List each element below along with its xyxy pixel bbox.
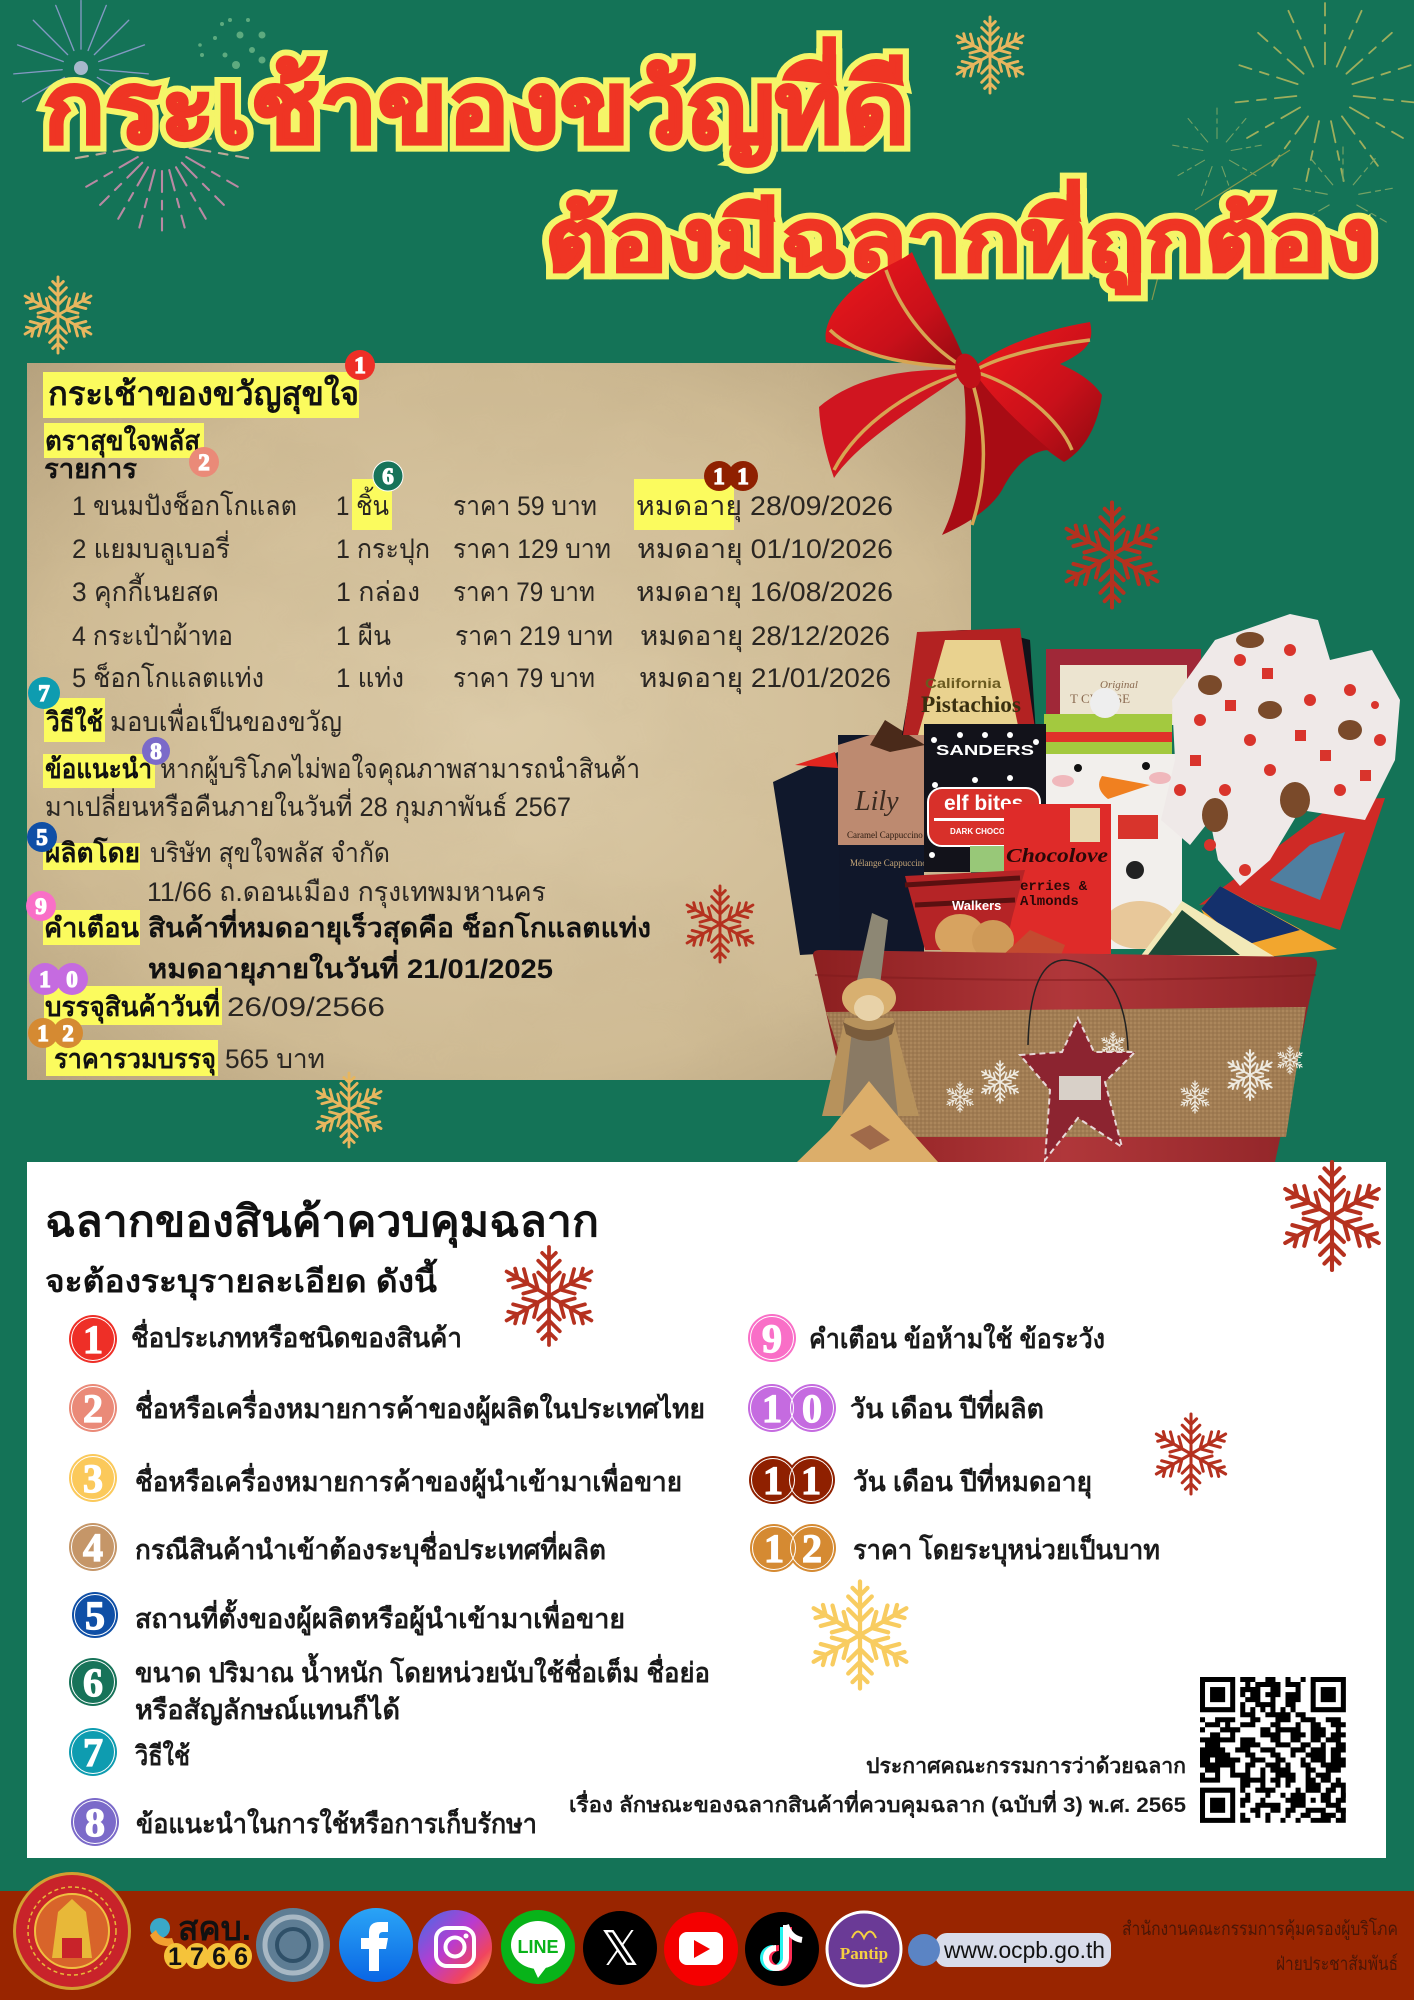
warning: คำเตือน	[44, 913, 140, 943]
brand: ตราสุขใจพลัส	[45, 425, 200, 458]
icon: Pantip	[827, 1912, 901, 1986]
icon: CP logo	[256, 1908, 330, 1982]
packing date: บรรจุสินค้าวันที่	[45, 987, 220, 1024]
item 12: 1	[764, 1526, 784, 1571]
advice	[45, 753, 640, 824]
badges on paper	[26, 350, 758, 1048]
badges on paper: 9	[35, 894, 47, 919]
chocolove bar: erries &	[1020, 879, 1088, 895]
item 11: 1	[801, 1458, 821, 1503]
badges on paper: 8	[150, 739, 162, 764]
lily box	[795, 720, 927, 955]
hotline 1766	[150, 1910, 252, 1971]
fireworks: pink	[76, 135, 249, 230]
advice: มาเปลี่ยนหรือคืนภายในวันที่ 28 กุมภาพันธ์ 2567	[45, 788, 571, 824]
title: กระเช้าของขวัญที่ดี	[43, 37, 909, 167]
item rows: 3 คุกกี้เนยสด	[72, 572, 219, 609]
burlap band	[826, 1007, 1306, 1137]
item 3: 3	[83, 1456, 103, 1501]
item 2: 2	[83, 1386, 103, 1431]
item rows: ราคา 79 บาท	[453, 577, 595, 607]
icon: OCPB seal	[13, 1872, 131, 1990]
item rows: 1 กล่อง	[336, 577, 420, 607]
wire and star ornament	[1020, 960, 1135, 1160]
product name: กระเช้าของขวัญสุขใจ	[48, 374, 359, 415]
white snowflakes on band	[945, 1032, 1304, 1113]
badges on paper: 6	[382, 464, 394, 489]
packing date	[45, 987, 385, 1024]
snowflake: gold under paper	[313, 1073, 385, 1147]
item 5: สถานที่ตั้งของผู้ผลิตหรือผู้นำเข้ามาเพื่อขาย	[135, 1598, 625, 1636]
item 7: วิธีใช้	[134, 1740, 190, 1771]
item 5: 5	[85, 1593, 105, 1638]
item 2	[69, 1384, 705, 1432]
title: ต้องมีฉลากที่ถูกต้อง	[545, 179, 1375, 294]
item rows: ราคา 219 บาท	[455, 621, 613, 651]
badges on paper: 1	[713, 464, 725, 489]
icon: LINE: LINE	[517, 1937, 559, 1957]
item rows: 1 ขนมปังช็อกโกแลต	[72, 488, 297, 521]
cheese box: Original	[1100, 679, 1138, 691]
item 10: 0	[802, 1386, 822, 1431]
item 1: 1	[83, 1317, 103, 1362]
title: กระเช้าของขวัญที่ดี	[43, 37, 909, 167]
item 10: 1	[762, 1386, 782, 1431]
item 12: ราคา โดยระบุหน่วยเป็นบาท	[853, 1532, 1160, 1567]
item 11: 1	[763, 1458, 783, 1503]
icon: LINE	[501, 1910, 575, 1984]
warning: สินค้าที่หมดอายุเร็วสุดคือ ช็อกโกแลตแท่ง	[148, 908, 651, 945]
item 1: ชื่อประเภทหรือชนิดของสินค้า	[131, 1318, 462, 1353]
hotline 1766: 1766	[168, 1943, 248, 1971]
badges on paper: 7	[38, 681, 50, 706]
item 3: ชื่อหรือเครื่องหมายการค้าของผู้นำเข้ามาเพื่อขาย	[135, 1462, 682, 1499]
item rows: 4 กระเป๋าผ้าทอ	[72, 621, 233, 651]
lily box: Mélange Cappuccino	[850, 858, 927, 868]
item 10: วัน เดือน ปีที่ผลิต	[850, 1389, 1044, 1424]
item rows: ราคา 59 บาท	[453, 491, 597, 521]
item rows: หมดอายุ 28/12/2026	[640, 621, 890, 653]
website pill: www.ocpb.go.th	[943, 1937, 1105, 1963]
cheese wedges	[1140, 886, 1337, 957]
item 1	[69, 1315, 462, 1363]
subheading: จะต้องระบุรายละเอียด ดังนี้	[45, 1258, 438, 1301]
napkin	[1199, 798, 1385, 930]
item 6: หรือสัญลักษณ์แทนก็ได้	[135, 1692, 400, 1726]
footer bar	[0, 1891, 1414, 2000]
badges on paper: 1	[737, 464, 749, 489]
badges on paper: 5	[36, 825, 48, 850]
item 3	[69, 1454, 682, 1502]
item 4: 4	[83, 1525, 103, 1570]
illustration: gift basket	[773, 614, 1400, 1162]
lily box: Lily	[854, 786, 899, 817]
item 5	[72, 1592, 625, 1638]
QR code	[1200, 1677, 1351, 1823]
packing date: 26/09/2566	[227, 992, 385, 1022]
hotline 1766: สคบ.	[178, 1910, 251, 1948]
advice: หากผู้บริโภคไม่พอใจคุณภาพสามารถนำสินค้า	[160, 753, 640, 786]
panel: label requirements	[27, 1162, 1386, 1858]
pistachios box: Pistachios	[921, 692, 1021, 717]
manufacturer: ผลิตโดย	[45, 836, 140, 868]
item rows: หมดอายุ 16/08/2026	[636, 577, 893, 609]
icon: TikTok	[745, 1912, 819, 1986]
snowflakes	[501, 1162, 1385, 1688]
snowflake: left gold	[21, 277, 95, 353]
sanders box: DARK CHOCOLATE	[950, 827, 1026, 836]
total price	[54, 1044, 325, 1076]
icon: X: 𝕏	[601, 1923, 639, 1976]
item 6: 6	[83, 1660, 103, 1705]
ribbon bow	[1161, 614, 1400, 886]
item 6	[69, 1652, 710, 1726]
item 7: 7	[83, 1730, 103, 1775]
item 8: ข้อแนะนำในการใช้หรือการเก็บรักษา	[136, 1806, 537, 1839]
item rows	[72, 486, 893, 695]
left navy box	[773, 752, 885, 955]
snowflake: red on paper	[683, 886, 757, 962]
icon: Pantip: Pantip	[840, 1944, 888, 1963]
title: ต้องมีฉลากที่ถูกต้อง	[545, 179, 1375, 294]
icon: X	[583, 1911, 657, 1985]
cheese box: T CHEESE	[1070, 691, 1130, 706]
pail	[813, 950, 1317, 1162]
badges on paper: 1	[354, 353, 366, 378]
cheese box	[1046, 649, 1201, 725]
item 7	[69, 1728, 190, 1776]
icon: facebook	[339, 1908, 413, 1982]
badges on paper: 2	[62, 1021, 74, 1046]
list heading: รายการ	[44, 454, 138, 484]
item 4	[69, 1523, 606, 1571]
snowman box	[1044, 688, 1182, 949]
sanders box: SANDERS	[936, 742, 1034, 759]
item 6: ขนาด ปริมาณ น้ำหนัก โดยหน่วยนับใช้ชื่อเต็ม ชื่อย่อ	[135, 1652, 710, 1688]
fireworks: top right	[1152, 3, 1414, 300]
manufacturer: 11/66 ถ.ดอนเมือง กรุงเทพมหานคร	[147, 877, 546, 909]
item rows: หมดอายุ 28/09/2026	[636, 491, 893, 523]
website pill	[908, 1933, 1111, 1967]
item 12	[750, 1524, 1160, 1572]
pistachios box	[902, 628, 1036, 735]
snowflake: top gold	[953, 17, 1027, 93]
agency name	[1122, 1917, 1398, 1975]
heading: ฉลากของสินค้าควบคุมฉลาก	[45, 1198, 599, 1249]
item rows: ราคา 79 บาท	[453, 663, 595, 693]
fireworks: top left	[14, 0, 265, 102]
item rows: หมดอายุ 21/01/2026	[639, 663, 891, 695]
legal reference: ประกาศคณะกรรมการว่าด้วยฉลาก	[866, 1754, 1186, 1778]
snowman figurine	[797, 913, 938, 1162]
total price: 565 บาท	[225, 1044, 325, 1074]
walkers bag: Walkers	[952, 898, 1001, 913]
icon: YouTube	[664, 1912, 738, 1986]
snowflake: red on green	[1061, 502, 1163, 608]
chocolove bar: Almonds	[1020, 894, 1079, 910]
item rows: 5 ช็อกโกแลตแท่ง	[72, 660, 264, 693]
item rows: หมดอายุ 01/10/2026	[637, 534, 893, 566]
chocolove bar: Chocolove	[1006, 845, 1108, 867]
badges on paper: 2	[198, 450, 210, 475]
badges on paper: 1	[37, 1021, 49, 1046]
sanders box	[924, 724, 1046, 872]
sanders box: elf bites	[944, 792, 1023, 815]
advice: ข้อแนะนำ	[45, 754, 152, 784]
item 2: ชื่อหรือเครื่องหมายการค้าของผู้ผลิตในประเทศไทย	[135, 1389, 705, 1426]
icon: instagram	[418, 1910, 492, 1984]
item rows: 1 กระปุก	[336, 534, 430, 566]
usage: วิธีใช้	[45, 706, 103, 737]
item rows: 1 ผืน	[336, 621, 391, 651]
warning: หมดอายุภายในวันที่ 21/01/2025	[148, 949, 553, 986]
item rows: 1 แท่ง	[336, 663, 404, 693]
item rows: 1 ชิ้น	[336, 486, 389, 521]
usage: มอบเพื่อเป็นของขวัญ	[110, 703, 342, 737]
item 9	[748, 1314, 1105, 1362]
total price: ราคารวมบรรจุ	[54, 1044, 216, 1076]
item 9: 9	[762, 1316, 782, 1361]
panel: label example on paper	[26, 350, 971, 1080]
item 11: วัน เดือน ปีที่หมดอายุ	[853, 1462, 1092, 1499]
item 12: 2	[802, 1526, 822, 1571]
icon: red bow	[819, 252, 1102, 535]
item rows: 2 แยมบลูเบอรี่	[72, 530, 230, 565]
warning	[44, 908, 651, 986]
manufacturer	[45, 836, 546, 909]
item 10	[748, 1384, 1044, 1432]
legal reference	[569, 1754, 1186, 1819]
item 9: คำเตือน ข้อห้ามใช้ ข้อระวัง	[809, 1323, 1105, 1354]
pistachios box: California	[925, 675, 1001, 691]
legal reference: เรื่อง ลักษณะของฉลากสินค้าที่ควบคุมฉลาก (ฉบับที่ 3) พ.ศ. 2565	[569, 1789, 1186, 1819]
chocolove bar	[1004, 804, 1111, 954]
lily box: Caramel Cappuccino	[847, 830, 923, 840]
usage	[45, 703, 342, 737]
item rows: ราคา 129 บาท	[453, 534, 611, 564]
item 4: กรณีสินค้านำเข้าต้องระบุชื่อประเทศที่ผลิต	[135, 1530, 606, 1567]
manufacturer: บริษัท สุขใจพลัส จำกัด	[150, 837, 390, 870]
title	[43, 37, 1375, 294]
walkers bag	[905, 870, 1065, 960]
badges on paper: 0	[66, 967, 78, 992]
highlights	[43, 372, 734, 1076]
item 8: 8	[85, 1800, 105, 1845]
badges on paper: 1	[39, 967, 51, 992]
item 8	[71, 1798, 537, 1846]
item 11	[749, 1456, 1092, 1504]
